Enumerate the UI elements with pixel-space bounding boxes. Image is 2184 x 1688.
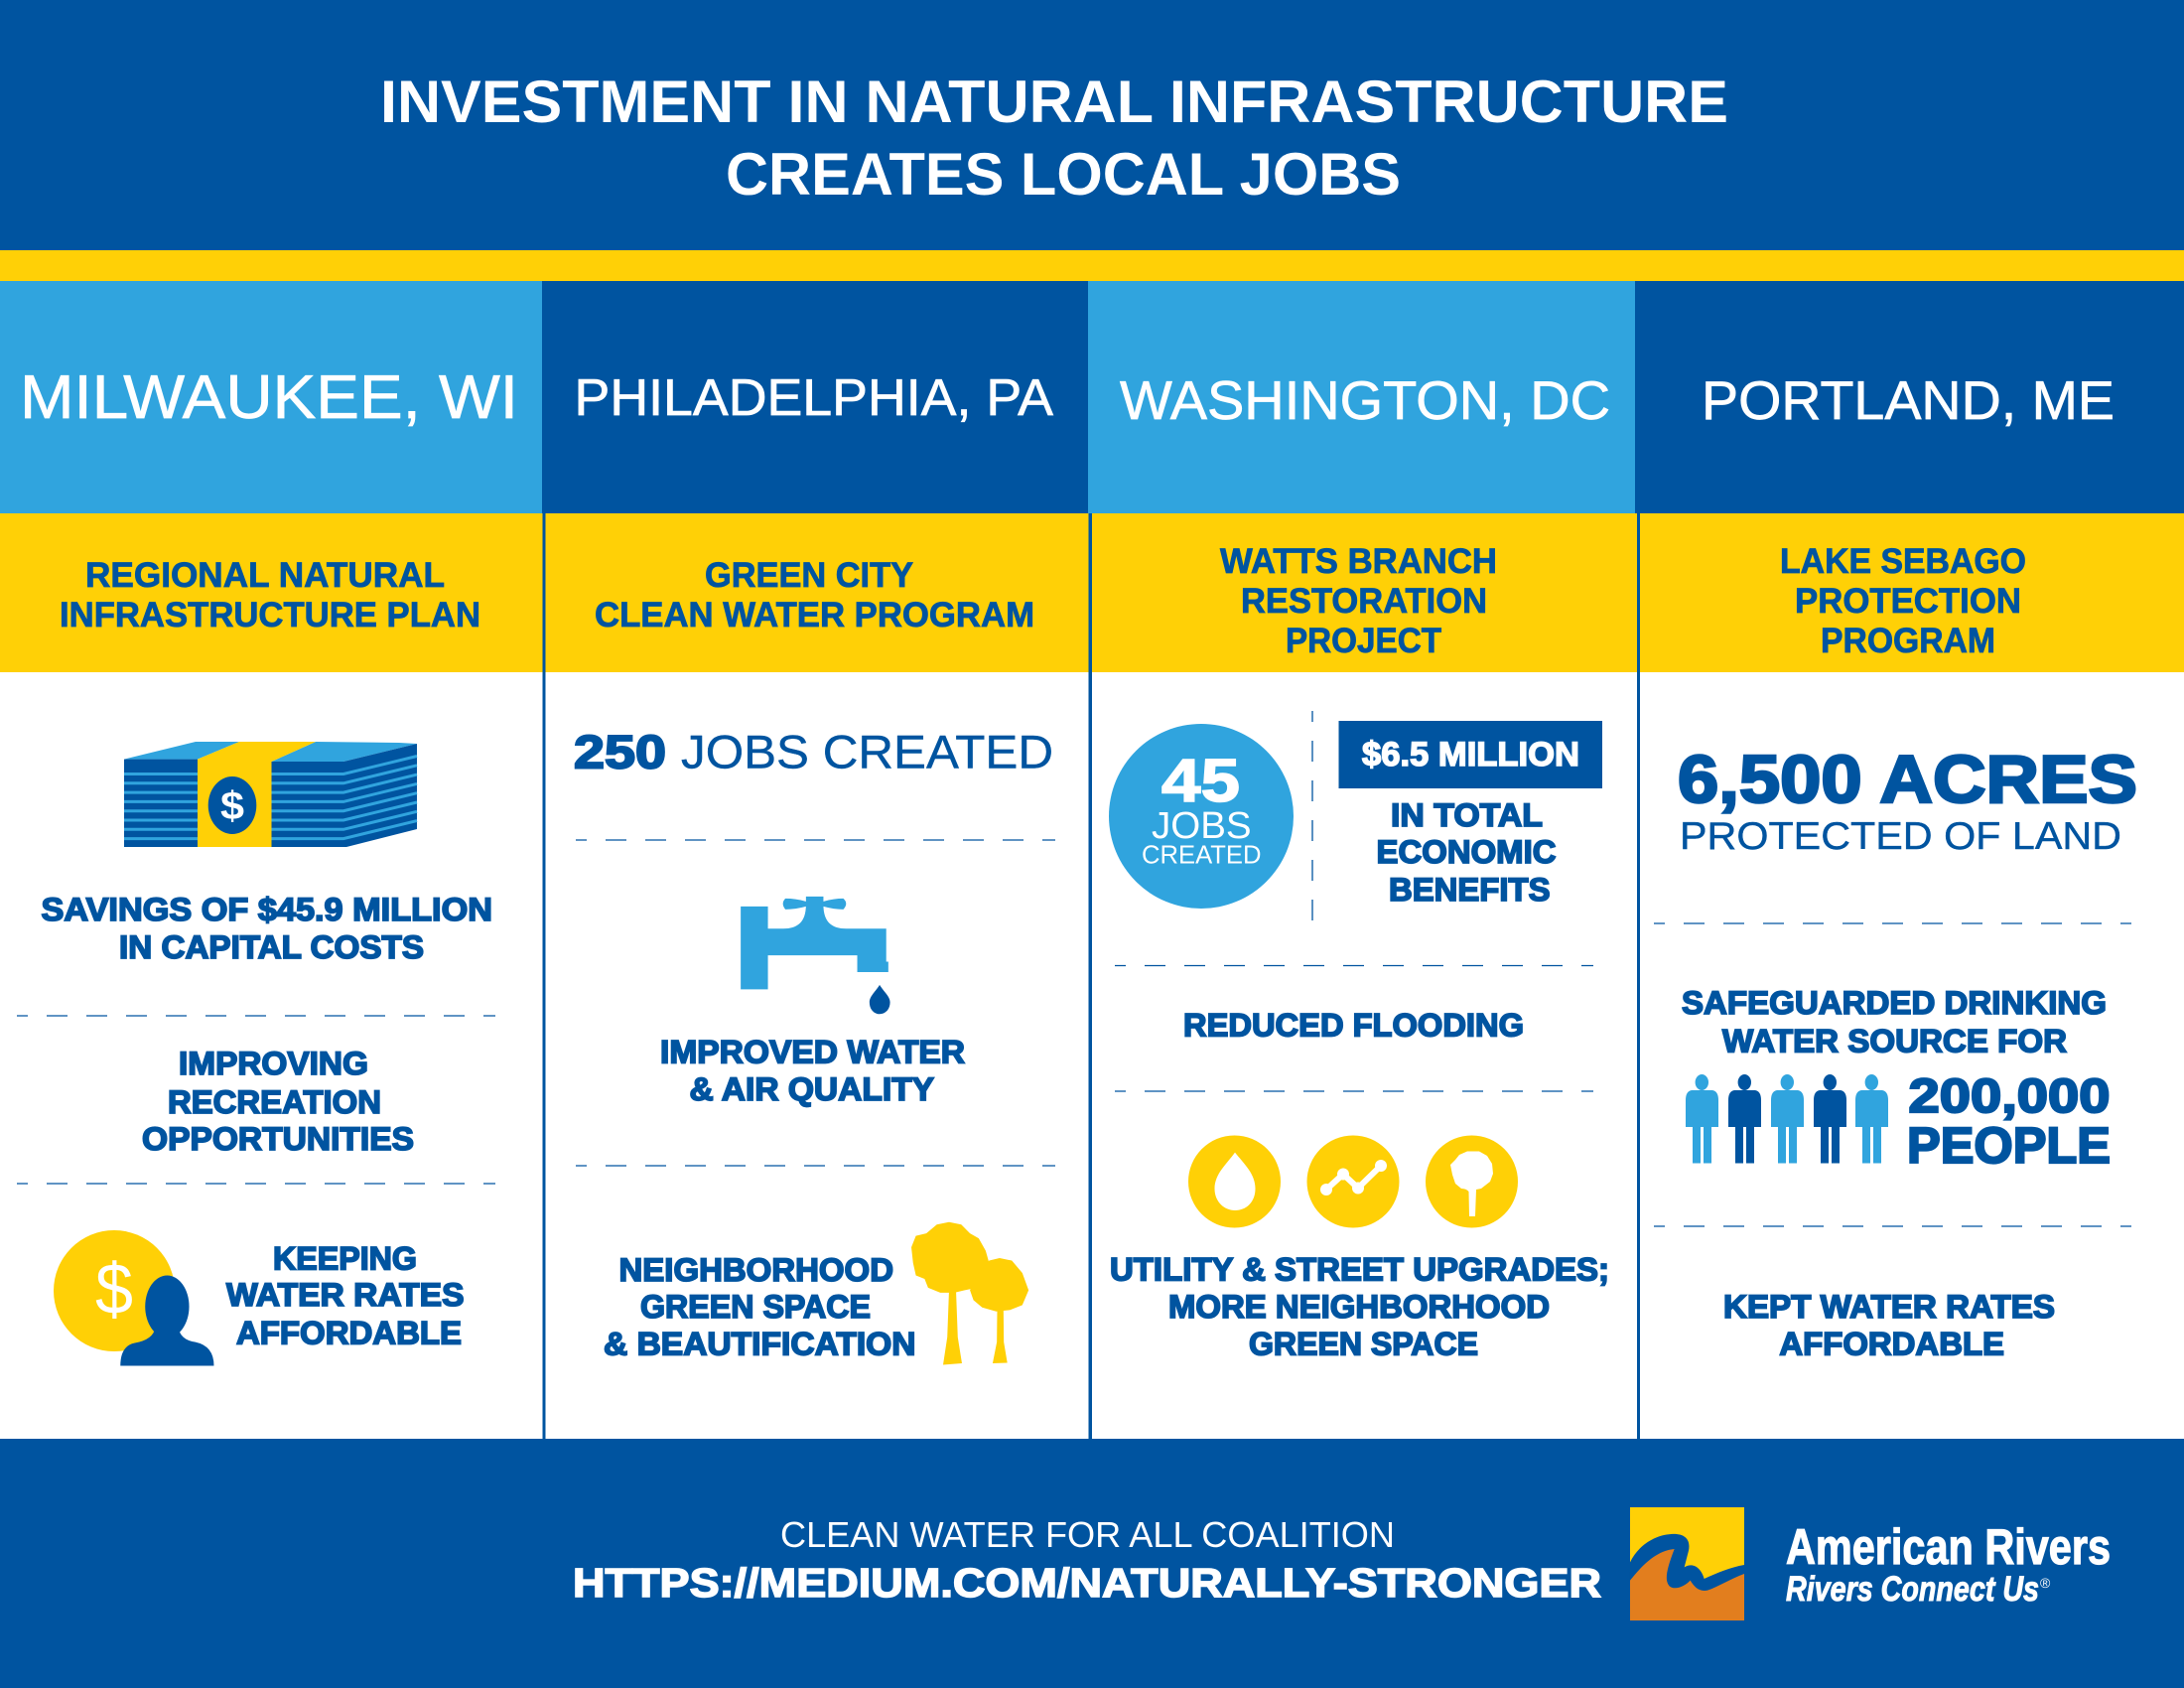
text: water rates (226, 1241, 465, 1350)
text: reduced flooding: REDUCED FLOODING (1183, 1008, 1524, 1044)
text: economic benefits: IN TOTAL (1391, 797, 1543, 833)
program name: Lake Sebago Protection Program: PROGRAM (1821, 622, 1995, 660)
city heading: Philadelphia (542, 281, 1089, 513)
program name: Lake Sebago Protection Program (1780, 542, 2026, 660)
text: green space: NEIGHBORHOOD (619, 1252, 893, 1288)
text: safeguarded drinking water: WATER SOURCE FOR (1722, 1024, 2067, 1059)
text: green space: GREEN SPACE (640, 1289, 871, 1325)
icon: faucet with drop (741, 897, 890, 1014)
text: savings: IN CAPITAL COSTS (119, 929, 424, 965)
text: kept water rates: KEPT WATER RATES (1723, 1289, 2055, 1325)
text: water rates: AFFORDABLE (236, 1315, 462, 1350)
icon: stack of money (124, 742, 417, 847)
text: recreation (142, 1046, 414, 1157)
city heading: Portland (1635, 281, 2184, 513)
icon: row of people (1686, 1074, 1888, 1164)
callout: 45 jobs created (1109, 724, 1294, 909)
program name: Lake Sebago Protection Program: LAKE SEBAGO (1780, 542, 2026, 581)
text: safeguarded drinking water (1682, 985, 2107, 1059)
text: savings (42, 892, 492, 965)
logo wordmark: American Rivers: ® (2040, 1575, 2051, 1591)
callout: $6.5 million: $6.5 MILLION (1362, 736, 1579, 774)
header band (0, 0, 2184, 281)
text: green space: & BEAUTIFICATION (604, 1327, 915, 1362)
icon: tree circle (1426, 1136, 1518, 1227)
city heading: Portland: PORTLAND, ME (1702, 369, 2115, 431)
text: 200,000 people: 200,000 (1908, 1070, 2111, 1123)
panel: Portland (1635, 281, 2184, 1440)
link: coalition url: HTTPS://MEDIUM.COM/NATURALLY-STRONGER (573, 1560, 1601, 1606)
program name: Watts Branch Restoration Project: PROJECT (1286, 622, 1441, 660)
text: coalition: CLEAN WATER FOR ALL COALITION (780, 1514, 1395, 1555)
text: utility upgrades: GREEN SPACE (1249, 1327, 1478, 1362)
callout: 45 jobs created: CREATED (1142, 840, 1261, 870)
text: water and air quality: & AIR QUALITY (689, 1071, 934, 1107)
program name: Regional Natural Infrastructure Plan (60, 556, 480, 634)
text: 6,500 acres protected: 6,500 ACRES (1678, 742, 2137, 817)
text: economic benefits (1376, 797, 1557, 908)
panel: Washington (1088, 281, 1637, 1440)
text: water rates: KEEPING (273, 1241, 417, 1277)
callout: $6.5 million (1338, 721, 1602, 788)
text: economic benefits: BENEFITS (1389, 872, 1551, 908)
text: 6,500 acres protected (1678, 742, 2137, 858)
logo wordmark: American Rivers (1786, 1519, 2111, 1609)
city heading: Milwaukee: MILWAUKEE, WI (20, 363, 518, 432)
icon: coin and person: $ (95, 1250, 133, 1330)
icon: water drop circle (1188, 1136, 1281, 1227)
title: INVESTMENT IN NATURAL INFRASTRUCTURE (380, 69, 1728, 135)
icon: stack of money: $ (220, 784, 244, 828)
text: 250 jobs created: 250 (574, 725, 666, 778)
text: green space (604, 1252, 915, 1362)
program name: Green City Clean Water Program (595, 556, 1034, 634)
callout: 45 jobs created: 45 (1161, 747, 1240, 814)
panel: Milwaukee (0, 281, 543, 1440)
callout: 45 jobs created: JOBS (1152, 805, 1252, 847)
program name: Watts Branch Restoration Project (1220, 542, 1497, 660)
text: kept water rates (1723, 1289, 2055, 1362)
program name: Watts Branch Restoration Project: RESTORATION (1241, 582, 1487, 621)
text: recreation: OPPORTUNITIES (142, 1121, 414, 1157)
text: 200,000 people (1907, 1070, 2111, 1174)
icon: trees (911, 1222, 1028, 1365)
icon: coin and person (54, 1230, 213, 1366)
logo wordmark: American Rivers: American Rivers (1786, 1519, 2111, 1575)
panel: Philadelphia (542, 281, 1089, 1440)
text: utility upgrades: MORE NEIGHBORHOOD (1168, 1289, 1550, 1325)
logo wordmark: American Rivers: Rivers Connect Us (1786, 1570, 2039, 1609)
text: water and air quality (660, 1035, 965, 1107)
city heading: Washington: WASHINGTON, DC (1120, 369, 1610, 431)
program name: Green City Clean Water Program: CLEAN WATER PROGRAM (595, 596, 1034, 634)
text: recreation: RECREATION (168, 1084, 381, 1120)
title (380, 69, 1728, 208)
text: water rates: WATER RATES (226, 1277, 465, 1313)
title: CREATES LOCAL JOBS (726, 141, 1401, 208)
text: savings: SAVINGS OF $45.9 MILLION (42, 892, 492, 927)
city heading: Milwaukee (0, 281, 543, 513)
program name: Green City Clean Water Program: GREEN CITY (705, 556, 913, 595)
text: economic benefits: ECONOMIC (1376, 834, 1557, 870)
text: 200,000 people: PEOPLE (1907, 1117, 2111, 1174)
text: utility upgrades: UTILITY & STREET UPGRADES; (1110, 1251, 1609, 1287)
text: 6,500 acres protected: PROTECTED OF LAND (1680, 815, 2121, 858)
text: recreation: IMPROVING (179, 1046, 368, 1081)
icon: trend line circle (1306, 1136, 1400, 1227)
text: safeguarded drinking water: SAFEGUARDED DRINKING (1682, 985, 2107, 1021)
city heading: Philadelphia: PHILADELPHIA, PA (574, 369, 1053, 427)
program name: Lake Sebago Protection Program: PROTECTION (1795, 582, 2021, 621)
logo mark: American Rivers (1630, 1507, 1744, 1620)
program name: Regional Natural Infrastructure Plan: INFRASTRUCTURE PLAN (60, 596, 480, 634)
text: 250 jobs created: JOBS CREATED (681, 725, 1053, 778)
footer band (0, 1439, 2184, 1688)
city heading: Washington (1088, 281, 1635, 513)
program name: Regional Natural Infrastructure Plan: REGIONAL NATURAL (85, 556, 445, 595)
text: water and air quality: IMPROVED WATER (660, 1035, 965, 1070)
text: kept water rates: AFFORDABLE (1779, 1327, 2004, 1362)
text: utility upgrades (1110, 1251, 1609, 1362)
program name: Watts Branch Restoration Project: WATTS BRANCH (1220, 542, 1497, 581)
